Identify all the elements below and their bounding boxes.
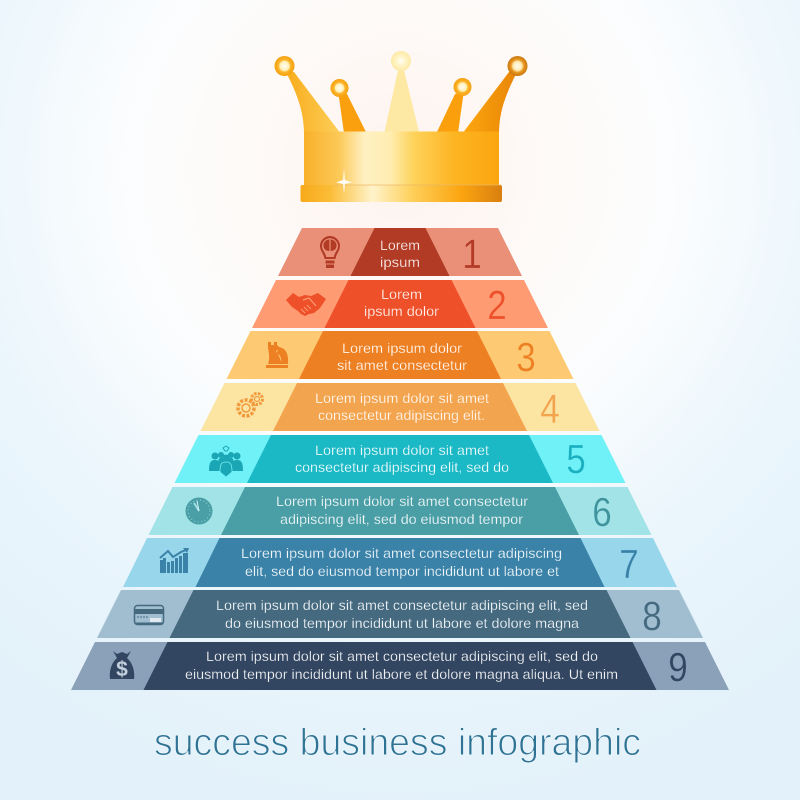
row 9: [71, 642, 729, 690]
row 5 text: Lorem ipsum dolor sit amet: [315, 442, 489, 458]
row 2 text: Lorem: [381, 286, 422, 302]
row 9 number: 9: [668, 644, 688, 690]
row 4 number: 4: [540, 386, 560, 432]
row 5 text panel: [247, 435, 553, 483]
row 9 icon: money bag: [110, 651, 134, 681]
row 8 number: 8: [642, 593, 662, 639]
row 1 text: Lorem: [380, 237, 420, 253]
crown outer right spike: [462, 72, 517, 134]
crown jewel 2: [330, 79, 348, 97]
row 7 number: 7: [619, 541, 639, 587]
crown rim: [300, 185, 502, 202]
crown sparkle: [336, 168, 352, 194]
row 4 text panel: [273, 383, 527, 431]
crown centre spike: [384, 68, 420, 134]
row 6: [148, 487, 652, 535]
icon: golden crown: [274, 51, 528, 202]
row 8 text panel: [170, 590, 630, 638]
row 7: [123, 538, 677, 587]
row 2 text panel: [324, 280, 476, 328]
crown jewel 4: [454, 78, 472, 96]
row 5 number: 5: [566, 436, 586, 482]
row 9 text: Lorem ipsum dolor sit amet consectetur adipiscing elit, sed do: [206, 648, 598, 664]
row 3 icon: chess pieces: [266, 342, 288, 368]
row 3 text: Lorem ipsum dolor: [342, 340, 462, 356]
row 5 icon: team: [209, 446, 243, 477]
row 1 text: [380, 237, 420, 270]
row 7 text: Lorem ipsum dolor sit amet consectetur adipiscing: [241, 545, 562, 561]
row 9 icon: money bag: $: [116, 658, 128, 681]
title: success business infographic: [154, 722, 641, 764]
crown band: [304, 132, 499, 186]
crown outer left spike: [286, 72, 341, 134]
crown inner right spike: [436, 94, 464, 133]
row 3: [226, 331, 574, 380]
row 1 icon: brain bulb: [320, 236, 340, 268]
row 5 band: [174, 435, 626, 483]
row 9 band: [71, 642, 729, 690]
crown jewel 5: [508, 56, 528, 76]
crown jewel 1: [274, 56, 294, 76]
row 7 text: elit, sed do eiusmod tempor incididunt ut labore et: [245, 563, 559, 579]
row 2 text: [364, 286, 439, 319]
crown inner left spike: [338, 94, 366, 133]
row 6 text panel: [221, 487, 579, 535]
row 2 icon: handshake: [286, 293, 326, 316]
row 8 text: do eiusmod tempor incididunt ut labore et dolore magna: [225, 615, 579, 631]
row 2 band: [252, 280, 548, 328]
row 6 number: 6: [592, 489, 612, 535]
row 5 text: [295, 442, 509, 475]
crown rim highlight: [335, 184, 501, 186]
row 8 text: [216, 597, 588, 631]
row 2: [252, 280, 548, 328]
row 7 text panel: [196, 538, 604, 587]
row 6 icon: clock: [186, 498, 212, 524]
row 9 text: [185, 648, 618, 682]
row 8 band: [97, 590, 703, 638]
row 3 text: [337, 340, 467, 373]
row 8 text: Lorem ipsum dolor sit amet consectetur adipiscing elit, sed: [216, 597, 588, 613]
row 4 band: [200, 383, 600, 431]
row 1 number: 1: [462, 231, 482, 277]
row 7 band: [123, 538, 677, 587]
row 6 text: Lorem ipsum dolor sit amet consectetur: [276, 493, 528, 509]
row 4 text: [315, 390, 489, 423]
row 3 number: 3: [516, 334, 536, 380]
row 2 text: ipsum dolor: [364, 303, 439, 319]
row 4: [200, 383, 600, 432]
crown jewel 3: [391, 51, 411, 71]
row 4 icon: gears: [238, 394, 262, 416]
row 1: [278, 228, 522, 277]
row 9 text: eiusmod tempor incididunt ut labore et dolore magna aliqua. Ut enim: [185, 666, 618, 682]
row 5: [174, 435, 626, 483]
row 5 text: consectetur adipiscing elit, sed do: [295, 459, 509, 475]
row 1 text panel: [350, 228, 450, 276]
row 3 band: [226, 331, 574, 379]
row 2 number: 2: [487, 282, 507, 328]
row 6 text: [276, 493, 528, 527]
row 1 band: [278, 228, 522, 276]
row 8 icon: credit card: [134, 606, 164, 624]
row 4 text: consectetur adipiscing elit.: [318, 407, 485, 423]
row 1 text: ipsum: [380, 254, 420, 270]
row 3 text panel: [299, 331, 501, 379]
row 6 text: adipiscing elit, sed do eiusmod tempor: [280, 511, 523, 527]
row 6 band: [148, 487, 652, 535]
row 7 text: [241, 545, 562, 579]
row 9 text panel: [144, 642, 656, 690]
row 4 text: Lorem ipsum dolor sit amet: [315, 390, 489, 406]
row 8: [97, 590, 703, 639]
row 3 text: sit amet consectetur: [337, 357, 467, 373]
row 7 icon: growth chart: [160, 548, 189, 573]
